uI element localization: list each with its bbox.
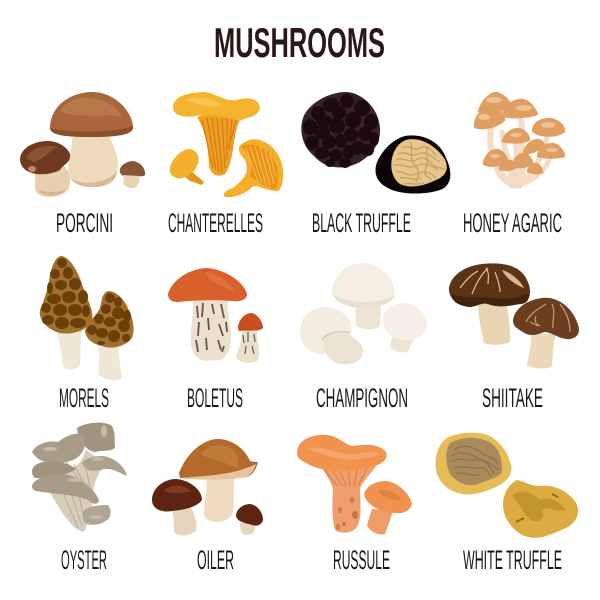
title: MUSHROOMS [214, 19, 385, 66]
illustration: morels [40, 256, 134, 380]
illustration: white truffle [435, 433, 578, 538]
text: BOLETUS [187, 383, 243, 413]
illustration: porcini [20, 92, 145, 197]
illustration: honey agaric [475, 93, 564, 186]
label: shiitake: SHIITAKE [482, 383, 543, 413]
text: CHAMPIGNON [316, 383, 408, 413]
illustration: shiitake [449, 263, 579, 369]
illustration: champignon [300, 263, 427, 364]
text: CHANTERELLES [168, 208, 263, 238]
text: RUSSULE [333, 545, 390, 575]
text: OILER [197, 545, 234, 575]
illustration: oyster [32, 423, 127, 532]
illustration: black truffle [301, 92, 450, 194]
illustration: boletus [168, 268, 263, 363]
label: porcini: PORCINI [56, 208, 113, 238]
illustration: oiler [152, 439, 263, 535]
text: BLACK TRUFFLE [312, 208, 411, 238]
illustration: chanterelles [170, 92, 283, 197]
text: MORELS [59, 383, 109, 413]
text: OYSTER [61, 545, 107, 575]
illustration: russule [297, 435, 412, 535]
